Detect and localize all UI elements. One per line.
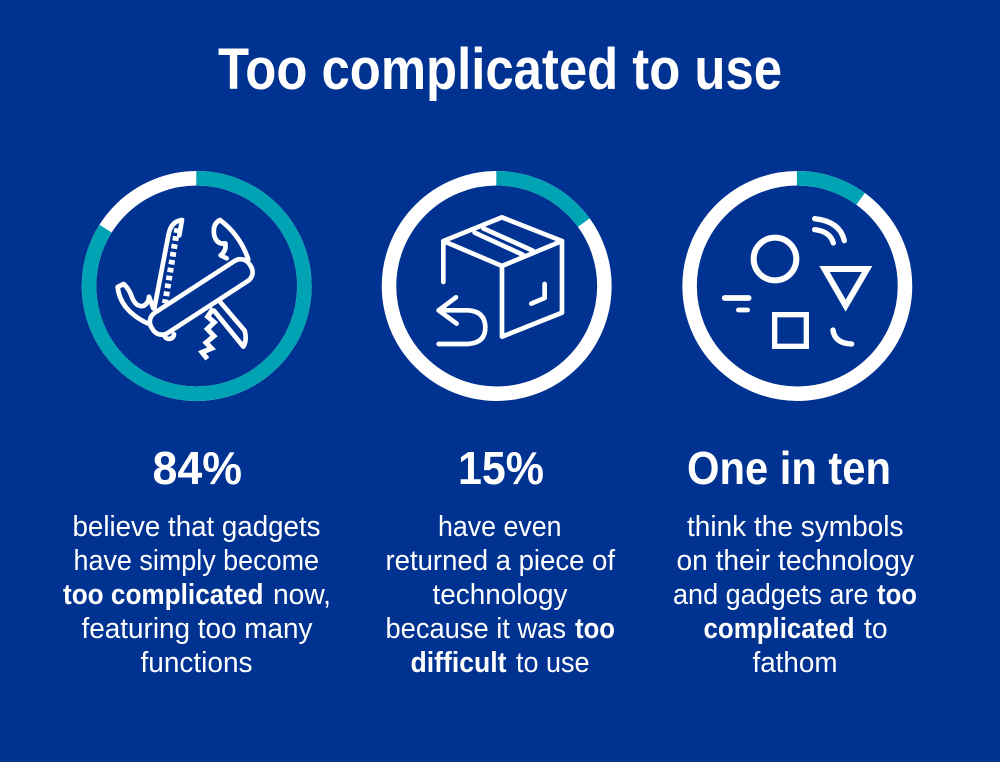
statistic: 15%: 15% <box>458 442 544 494</box>
text block: 15% description: have even <box>438 511 562 543</box>
text block: one in ten description: fathom <box>752 647 838 679</box>
text block: 84% description: now, <box>273 579 331 611</box>
text block: 84% description: have simply become <box>74 545 319 577</box>
donut chart: 84% <box>89 178 304 394</box>
text block: 84% description <box>63 511 331 679</box>
statistic: 84%: 84% <box>152 442 242 494</box>
text block: 84% description: functions <box>140 647 252 679</box>
text block: 15% description: too <box>575 613 615 645</box>
text block: 15% description <box>386 511 616 679</box>
title: Too complicated to use <box>218 37 782 102</box>
text block: 15% description: technology <box>432 579 568 611</box>
text block: 84% description: too complicated <box>63 579 264 611</box>
panel: 84% gadgets too complicated <box>63 178 331 679</box>
donut chart: one in ten <box>690 178 905 394</box>
text block: one in ten description <box>673 511 917 679</box>
icon: symbols <box>725 219 867 346</box>
text block: 84% description: believe that gadgets <box>72 511 320 543</box>
donut chart: 15% <box>389 178 604 394</box>
text block: one in ten description: too <box>877 579 917 611</box>
text block: one in ten description: complicated <box>704 613 854 645</box>
icon: returned box <box>439 217 562 344</box>
statistic: one in ten: One in ten <box>687 442 891 494</box>
panel: 15% returned technology <box>386 178 616 679</box>
text block: one in ten description: to <box>864 613 888 645</box>
text block: one in ten description: think the symbols <box>687 511 904 543</box>
text block: 84% description: featuring too many <box>82 613 313 645</box>
text block: 15% description: difficult <box>410 647 507 679</box>
text block: one in ten description: on their technology <box>676 545 914 577</box>
text block: 15% description: to use <box>516 647 590 679</box>
text block: one in ten description: and gadgets are <box>673 579 868 611</box>
text block: 15% description: returned a piece of <box>386 545 616 577</box>
text block: 15% description: because it was <box>386 613 566 645</box>
panel: one in ten symbols <box>673 178 917 679</box>
icon: swiss army knife <box>118 220 257 359</box>
